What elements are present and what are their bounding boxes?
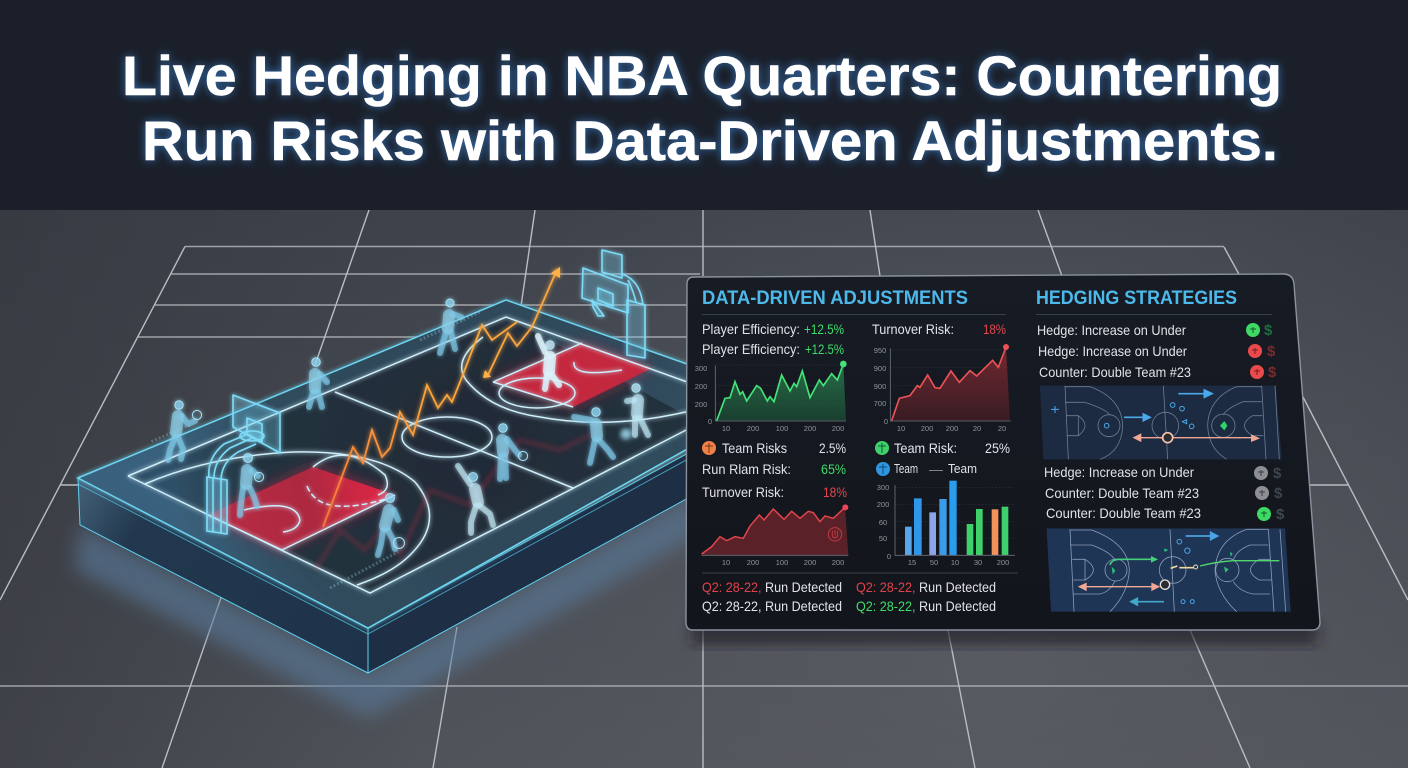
arrow: blue top xyxy=(1178,390,1212,397)
holographic basketball court platform xyxy=(78,250,780,673)
green line chart: 10 xyxy=(722,424,730,433)
bar chart: 50 xyxy=(879,534,887,543)
icon: gray status xyxy=(1255,485,1283,502)
icon: green ball xyxy=(875,441,889,455)
run detected log: Q2: 28-22, Run Detected xyxy=(856,598,996,614)
bar chart: 0 xyxy=(887,552,891,561)
player 5 back far xyxy=(440,299,461,353)
red paint near xyxy=(208,467,395,550)
metric: turnover risk: Turnover Risk: xyxy=(872,321,954,337)
route: yellow to green xyxy=(1171,561,1279,569)
metric: player efficiency rows: +12.5% xyxy=(805,341,844,357)
metric: turnover risk xyxy=(872,321,1006,337)
icon: gray status xyxy=(1254,465,1282,482)
player markers xyxy=(1177,539,1194,604)
bar chart xyxy=(877,481,1015,567)
title text xyxy=(122,44,1282,172)
red line chart: 200 xyxy=(946,424,958,433)
blue defenders xyxy=(1051,403,1194,429)
red line chart: 900 xyxy=(874,364,886,373)
run risk row: Run Rlam Risk: xyxy=(702,461,791,477)
court lines xyxy=(128,317,690,593)
team legend row: Team xyxy=(894,461,918,476)
metric: player efficiency rows xyxy=(702,321,844,357)
icon: gray status: $ xyxy=(1274,485,1283,502)
red area chart: 200 xyxy=(832,558,844,567)
icon: green status: $ xyxy=(1276,506,1285,523)
player 4 with ball xyxy=(378,494,404,555)
reflected red chart xyxy=(315,435,590,570)
hoop near xyxy=(207,395,280,534)
strategy list lower: Hedge: Increase on Under xyxy=(1044,464,1194,480)
arrow: teal left xyxy=(1131,598,1164,605)
run detected log: Q2: 28-22, Run Detected xyxy=(702,579,842,595)
strategy list lower: Counter: Double Team #23 xyxy=(1045,485,1199,501)
node: ball handler xyxy=(1160,580,1170,589)
red area chart: 10 xyxy=(722,558,730,567)
run risk row: 65% xyxy=(821,461,846,477)
metric: turnover risk: 18% xyxy=(983,321,1006,337)
bar chart: 200 xyxy=(997,558,1009,567)
green line chart: 200 xyxy=(804,424,816,433)
run detected log: Q2: 28-22, Run Detected xyxy=(856,579,996,595)
icon: red status: $ xyxy=(1268,364,1277,381)
title band xyxy=(0,0,1408,210)
tactic court diagram lower xyxy=(1047,528,1291,612)
arrow: two-way peach xyxy=(1134,434,1258,441)
run risk row xyxy=(702,461,846,477)
player 2 back xyxy=(309,358,327,407)
bar chart: 200 xyxy=(877,500,889,509)
green line chart: 100 xyxy=(776,424,788,433)
team risks row: Team Risks xyxy=(722,440,787,456)
turnover risk row: Turnover Risk: xyxy=(702,484,784,500)
red paint far xyxy=(493,343,652,407)
player 6 shooter xyxy=(538,336,559,389)
platform right side face xyxy=(368,452,690,673)
strategy list upper: Hedge: Increase on Under xyxy=(1038,343,1187,359)
platform floor reflection xyxy=(75,492,700,718)
metric: player efficiency rows: Player Efficiency: xyxy=(702,341,800,357)
team legend row xyxy=(876,461,977,476)
team risk row: 25% xyxy=(985,440,1010,456)
tactic court diagram upper xyxy=(1040,386,1282,459)
player 1 with ball xyxy=(168,401,202,460)
team risk row xyxy=(875,440,1010,456)
green marker xyxy=(1220,421,1227,430)
red line chart xyxy=(874,344,1011,433)
arrow: two-way peach xyxy=(1079,584,1159,590)
platform left side face xyxy=(78,478,368,673)
red line chart: 10 xyxy=(897,424,905,433)
arrow: blue center xyxy=(1124,414,1150,421)
red line chart: 20 xyxy=(998,424,1006,433)
red line chart: 900 xyxy=(874,382,886,391)
red area chart: 200 xyxy=(804,558,816,567)
bar chart: 60 xyxy=(879,518,887,527)
red line chart: 0 xyxy=(884,417,888,426)
icon: gray status: $ xyxy=(1273,465,1282,482)
team legend row: Team xyxy=(948,461,977,476)
green line chart xyxy=(695,361,847,433)
strategy list lower xyxy=(1044,464,1285,523)
hoop far xyxy=(582,250,645,358)
turnover risk row xyxy=(702,484,847,500)
floor background xyxy=(0,210,1408,768)
player 10 xyxy=(621,384,648,439)
icon: blue ball xyxy=(876,462,890,476)
platform rim band xyxy=(78,300,780,628)
title text: Run Risks with Data-Driven Adjustments. xyxy=(142,109,1278,172)
team risks row xyxy=(702,440,846,456)
run detected log: Q2: 28-22, Run Detected xyxy=(702,598,842,614)
red line chart: 20 xyxy=(973,424,981,433)
heading: hedging strategies: HEDGING STRATEGIES xyxy=(1036,288,1237,309)
title text: Live Hedging in NBA Quarters: Countering xyxy=(122,44,1282,107)
icon: red status xyxy=(1248,343,1276,360)
icon: green status xyxy=(1257,506,1285,523)
icon: clock alert xyxy=(828,528,842,541)
red area chart: 200 xyxy=(747,558,759,567)
green line chart: 200 xyxy=(695,400,707,409)
green line chart: 200 xyxy=(747,424,759,433)
bar chart: 30 xyxy=(974,558,982,567)
strategy list upper xyxy=(1037,322,1277,381)
arrow: blue top xyxy=(1186,532,1218,540)
strategy list upper: Hedge: Increase on Under xyxy=(1037,322,1186,338)
bar chart: 50 xyxy=(930,558,938,567)
green line chart: 200 xyxy=(695,382,707,391)
player 7 with ball xyxy=(499,424,528,479)
turnover risk row: 18% xyxy=(823,484,847,500)
orange run line chart xyxy=(323,267,560,527)
team risks row: 2.5% xyxy=(819,440,846,456)
icon: red status xyxy=(1250,364,1277,381)
arrow: green curved xyxy=(1110,556,1158,565)
platform rim line xyxy=(78,458,690,634)
metric: player efficiency rows: Player Efficiency: xyxy=(702,321,800,337)
icon: green status: $ xyxy=(1264,322,1273,339)
player 9 running xyxy=(574,408,613,463)
icon: green status xyxy=(1246,322,1273,339)
heading: data-driven adjustments: DATA-DRIVEN ADJUSTMENTS xyxy=(702,288,968,309)
red line chart: 700 xyxy=(874,399,886,408)
bar chart: 15 xyxy=(908,558,916,567)
rim speckle text xyxy=(150,312,480,588)
player 3 with ball xyxy=(240,454,264,515)
icon: orange ball xyxy=(702,441,716,455)
red line chart: 950 xyxy=(874,346,886,355)
strategy list lower: Counter: Double Team #23 xyxy=(1046,505,1201,521)
dashboard panel xyxy=(686,274,1320,630)
player 8 arm raised xyxy=(458,466,493,533)
red area chart xyxy=(702,504,848,567)
floor grid lines xyxy=(0,210,1408,768)
bar chart: 10 xyxy=(951,558,959,567)
red area chart: 100 xyxy=(776,558,788,567)
run detected log xyxy=(702,579,996,614)
green line chart: 300 xyxy=(695,364,707,373)
bar chart: 300 xyxy=(877,483,889,492)
panel shadow xyxy=(692,622,1317,644)
green line chart: 200 xyxy=(832,424,844,433)
icon: red status: $ xyxy=(1267,343,1276,360)
metric: player efficiency rows: +12.5% xyxy=(804,321,844,337)
node: ball handler xyxy=(1163,433,1173,443)
platform top surface xyxy=(78,300,780,628)
green line chart: 0 xyxy=(708,417,712,426)
strategy list upper: Counter: Double Team #23 xyxy=(1039,364,1191,380)
team risk row: Team Risk: xyxy=(894,440,957,456)
red line chart: 200 xyxy=(921,424,933,433)
